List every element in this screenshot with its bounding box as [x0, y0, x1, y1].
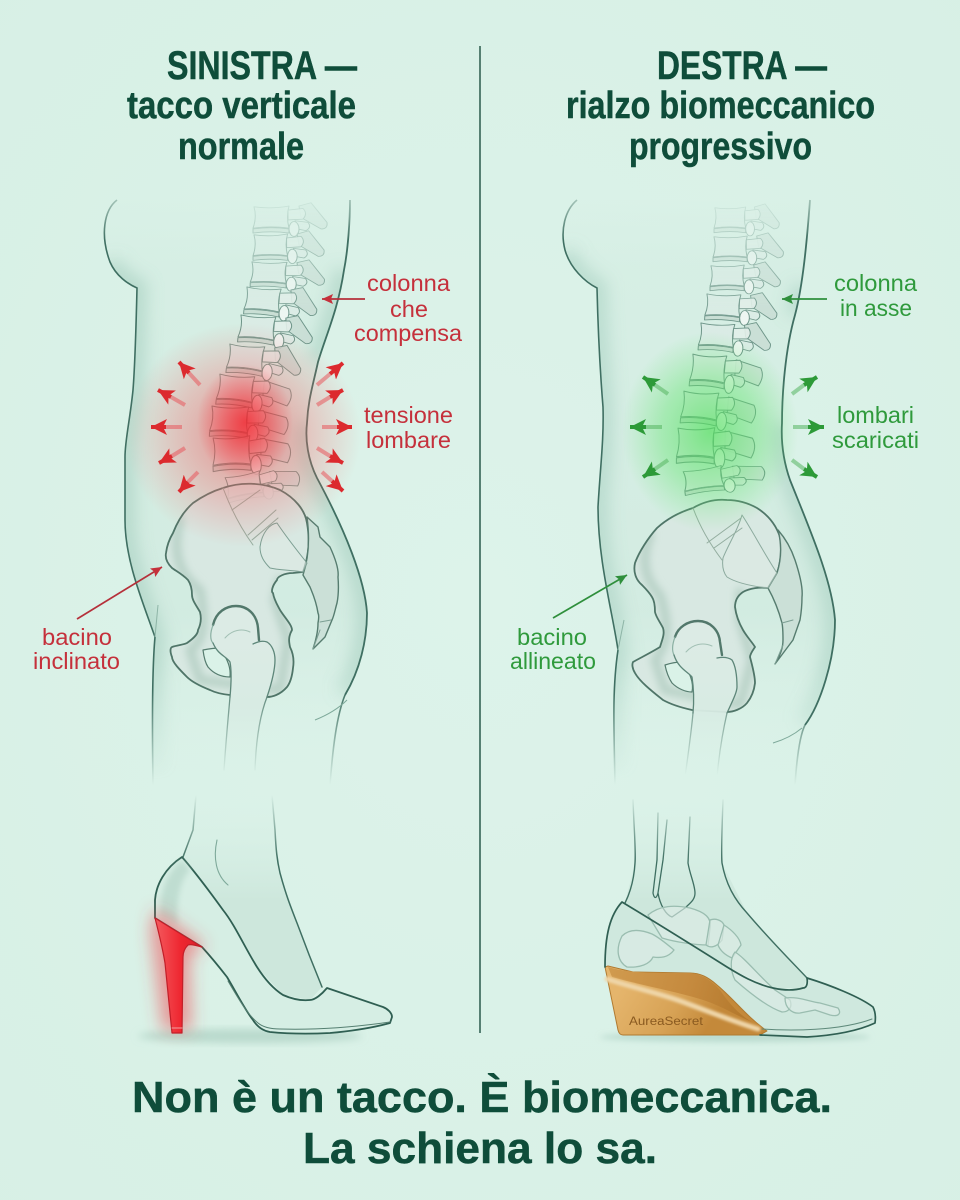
glow: lombari scaricati [622, 332, 798, 532]
heading: sinistra: SINISTRA — [167, 44, 357, 88]
callout: colonna in asse: colonna [834, 270, 917, 296]
brand: AureaSecret: AureaSecret [629, 1016, 704, 1028]
body outline: torso e coscia destra [563, 200, 835, 785]
panel: sinistra [33, 44, 462, 1043]
callout: tensione lombare [364, 402, 453, 453]
leg bones [653, 813, 695, 917]
callout: lombari scaricati: lombari [837, 402, 914, 428]
callout: colonna che compensa [322, 270, 462, 346]
body outline: torso e coscia sinistra [104, 200, 367, 785]
heading: sinistra: tacco verticale [127, 85, 356, 127]
footer slogan [132, 1072, 832, 1173]
callout: bacino inclinato: inclinato [33, 648, 120, 674]
arrows: radiating relief [630, 377, 824, 477]
divider [479, 46, 481, 1033]
pelvis: bacino allineato [632, 500, 802, 777]
lower leg, foot bones and wedge shoe [600, 800, 875, 1042]
callout: bacino allineato: bacino [517, 624, 587, 650]
callout: bacino inclinato: bacino [42, 624, 112, 650]
heading: sinistra [127, 44, 357, 168]
callout: colonna che compensa: compensa [354, 320, 462, 346]
shoe outline [605, 902, 875, 1037]
callout: lombari scaricati: scaricati [832, 427, 919, 453]
glow: tensione lombare [125, 323, 361, 547]
footer slogan: La schiena lo sa. [303, 1124, 657, 1173]
callout: bacino inclinato [33, 567, 162, 674]
lower leg and high heel shoe [138, 795, 392, 1043]
arrows: radiating tension [151, 362, 352, 492]
foot bones [618, 906, 840, 1016]
heading: destra: DESTRA — [657, 44, 827, 88]
heading: destra: rialzo biomeccanico [566, 85, 875, 127]
callout: colonna che compensa: che [390, 296, 428, 322]
panel: destra [510, 44, 919, 1042]
heel [155, 918, 202, 1033]
footer slogan: Non è un tacco. È biomeccanica. [132, 1072, 832, 1122]
callout: bacino allineato [510, 575, 627, 674]
callout: colonna in asse: in asse [840, 295, 912, 321]
callout: tensione lombare: tensione [364, 402, 453, 428]
shoe upper [605, 902, 875, 1037]
callout: lombari scaricati [832, 402, 919, 453]
callout: colonna in asse [782, 270, 917, 321]
callout: bacino allineato: allineato [510, 648, 596, 674]
heading: destra [566, 44, 875, 168]
pelvis: bacino inclinato [166, 484, 338, 770]
callout: colonna che compensa: colonna [367, 270, 450, 296]
spine: colonna in asse [676, 204, 783, 498]
heading: destra: progressivo [629, 126, 812, 168]
heading: sinistra: normale [178, 126, 304, 168]
spine: colonna che compensa [209, 203, 327, 506]
glow: heel [150, 908, 205, 1030]
wedge sole [605, 966, 767, 1035]
callout: tensione lombare: lombare [366, 427, 451, 453]
